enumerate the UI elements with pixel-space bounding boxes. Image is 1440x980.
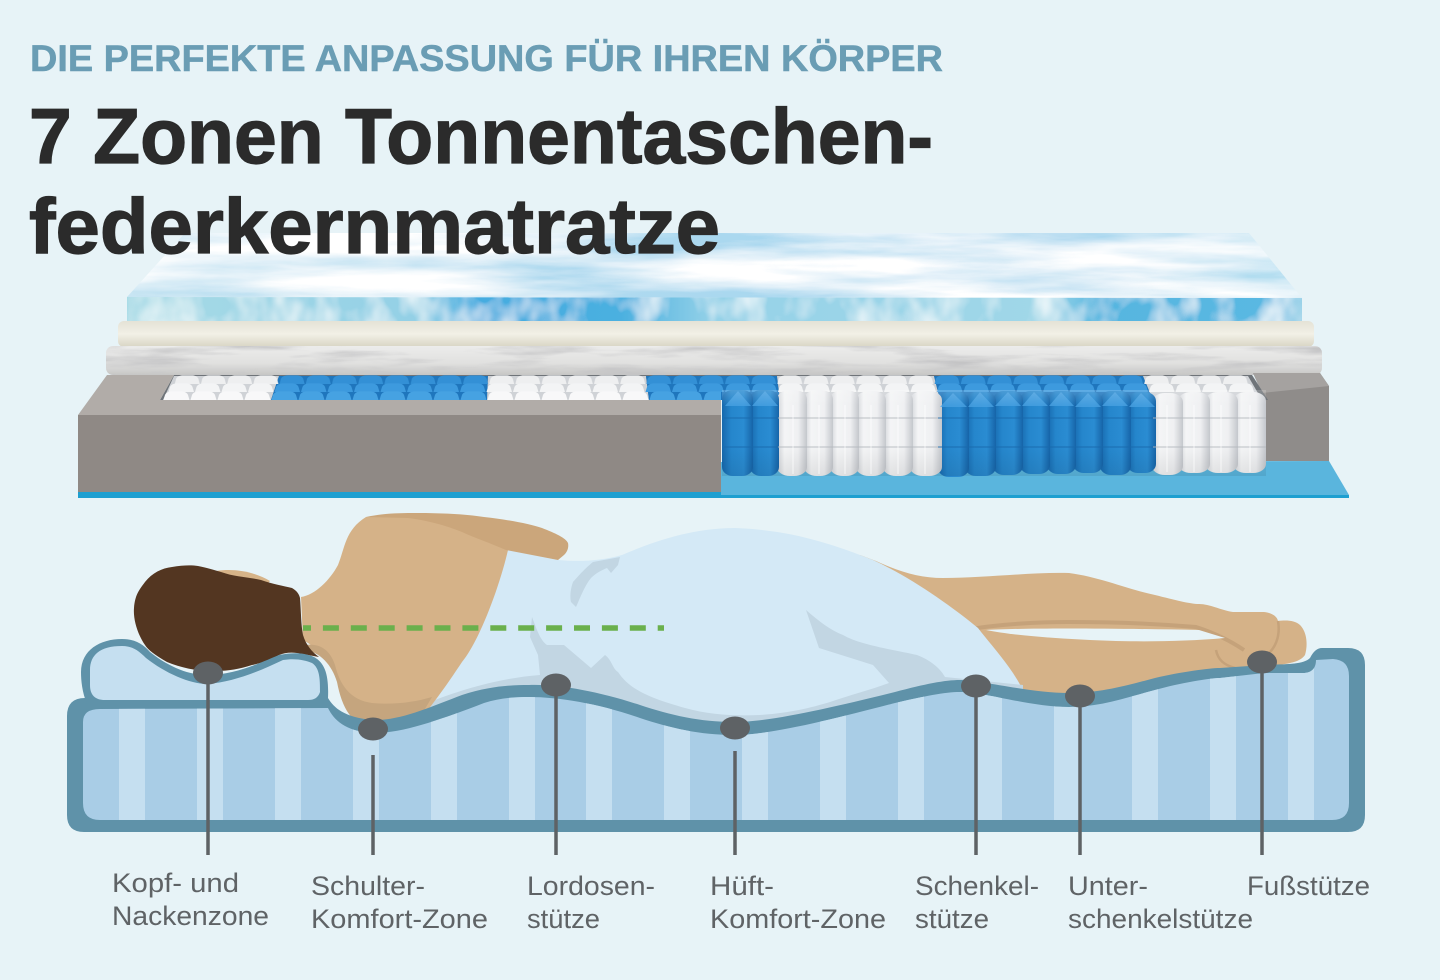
zone marker: Lordosenstütze (527, 674, 655, 934)
zone marker: Schenkelstütze (915, 674, 1039, 934)
eyebrow heading: DIE PERFEKTE ANPASSUNG FÜR IHREN KÖRPER (30, 38, 943, 79)
zone marker: Hüft-Komfort-Zone: Komfort-Zone (710, 904, 886, 934)
zone marker: Schulter-Komfort-Zone (311, 718, 488, 934)
legs (860, 555, 1307, 700)
spine alignment dashed line (303, 625, 664, 631)
zone marker: Kopf- und Nackenzone: Kopf- und (112, 868, 239, 898)
cream comfort layer (118, 321, 1314, 347)
pillow (81, 639, 328, 704)
head and hair (134, 565, 319, 671)
right grey foam block (1253, 373, 1329, 461)
shirt fold shadows (372, 557, 1023, 740)
zone marker: Fußstütze (1247, 650, 1370, 901)
mattress cross-section (67, 648, 1365, 832)
upper arm (366, 513, 568, 560)
zone marker: Fußstütze: Fußstütze (1247, 871, 1370, 901)
torso skin (301, 515, 520, 726)
illustration: sleeper on mattress (67, 513, 1365, 832)
zone marker: Unterschenkelstütze: Unter- (1068, 871, 1148, 901)
zone marker: Hüft-Komfort-Zone: Hüft- (710, 871, 774, 901)
zone marker: Kopf- und Nackenzone (112, 662, 269, 931)
zone marker: Unterschenkelstütze: schenkelstütze (1068, 904, 1253, 934)
mattress cutaway photo (78, 233, 1349, 498)
main title: 7 Zonen Tonnentaschen- (29, 92, 933, 180)
pocket spring columns (722, 390, 1266, 477)
zone marker: Schenkelstütze: Schenkel- (915, 871, 1039, 901)
zone marker: Schulter-Komfort-Zone: Komfort-Zone (311, 904, 488, 934)
nightshirt (430, 528, 1023, 735)
zone marker: Hüft-Komfort-Zone (710, 716, 886, 934)
zone marker: Schenkelstütze: stütze (915, 904, 989, 934)
main title: federkernmatratze (29, 182, 720, 270)
spring tops in the recess (160, 375, 1268, 400)
zone marker: Unterschenkelstütze (1065, 684, 1253, 934)
zone marker: Lordosenstütze: stütze (527, 904, 600, 934)
zone marker: Kopf- und Nackenzone: Nackenzone (112, 901, 269, 931)
gel foam top layer (127, 233, 1302, 322)
zone marker: Schulter-Komfort-Zone: Schulter- (311, 871, 425, 901)
blue base layer (78, 461, 1349, 498)
grey marbled foam layer (106, 346, 1322, 375)
zone marker: Lordosenstütze: Lordosen- (527, 871, 655, 901)
left grey foam block (78, 375, 721, 492)
